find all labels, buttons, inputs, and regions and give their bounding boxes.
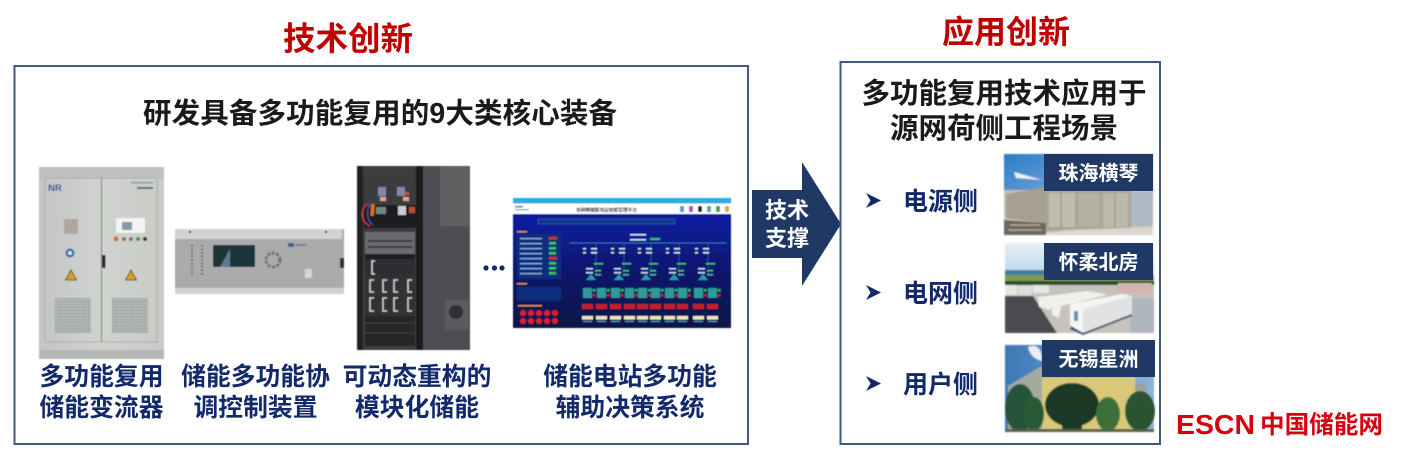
place label [1044, 154, 1153, 191]
label: 电网侧 [903, 280, 978, 308]
panel heading: 研发具备多功能复用的9大类核心装备 [143, 98, 617, 130]
label: modular storage: 模块化储能 [355, 394, 479, 422]
bullet arrow [866, 376, 881, 391]
label: coordination control device: 储能多功能协 [181, 363, 330, 391]
photo: converter cabinet: NR [48, 183, 62, 194]
logo: ESCN [1176, 409, 1383, 440]
label: 用户侧 [903, 371, 978, 399]
photo: Zhuhai Hengqin [1004, 154, 1153, 235]
photo: coordination control device [175, 229, 344, 294]
arrow: technical support [752, 162, 841, 286]
screenshot: decision support system [513, 198, 731, 328]
photo: converter cabinet [39, 167, 164, 359]
photo: Wuxi Xingzhou: 无锡星洲 [1058, 348, 1138, 371]
logo: ESCN: 中国储能网 [1260, 411, 1383, 439]
logo: ESCN: ESCN [1176, 409, 1255, 440]
photo: modular storage rack [357, 166, 470, 350]
place label [1044, 243, 1153, 280]
photo: Zhuhai Hengqin: 珠海横琴 [1058, 162, 1138, 185]
place label [1042, 340, 1155, 377]
arrow: technical support: 支撑 [765, 226, 809, 251]
photo: Huairou Beifang [1005, 243, 1154, 335]
arrow: technical support: 技术 [765, 198, 809, 223]
label: modular storage: 可动态重构的 [343, 363, 491, 391]
label: multifunction converter: 储能变流器 [40, 394, 164, 422]
photo: Huairou Beifang: 怀柔北房 [1058, 251, 1138, 274]
panel: technology innovation [14, 66, 748, 444]
row: source side [866, 188, 978, 216]
screenshot: decision support system: 电网侧储能电站智能管理平台 [576, 206, 637, 214]
label: decision support system: 辅助决策系统 [556, 393, 705, 422]
bullet arrow [866, 193, 881, 208]
label: decision support system: 储能电站多功能 [543, 363, 717, 391]
panel heading: 多功能复用技术应用于 [861, 78, 1147, 110]
title: application innovation: 应用创新 [942, 14, 1070, 50]
row: grid side [866, 280, 978, 308]
bullet arrow [866, 285, 881, 300]
row: user side [866, 371, 978, 399]
label: coordination control device: 调控制装置 [194, 394, 318, 422]
title: technology innovation: 技术创新 [283, 21, 413, 57]
ellipsis dots [483, 265, 505, 271]
label: 电源侧 [903, 188, 978, 216]
panel heading: 源网荷侧工程场景 [890, 113, 1118, 145]
photo: Wuxi Xingzhou [1005, 340, 1155, 432]
label: multifunction converter: 多功能复用 [40, 363, 164, 391]
panel: application innovation [840, 62, 1160, 444]
